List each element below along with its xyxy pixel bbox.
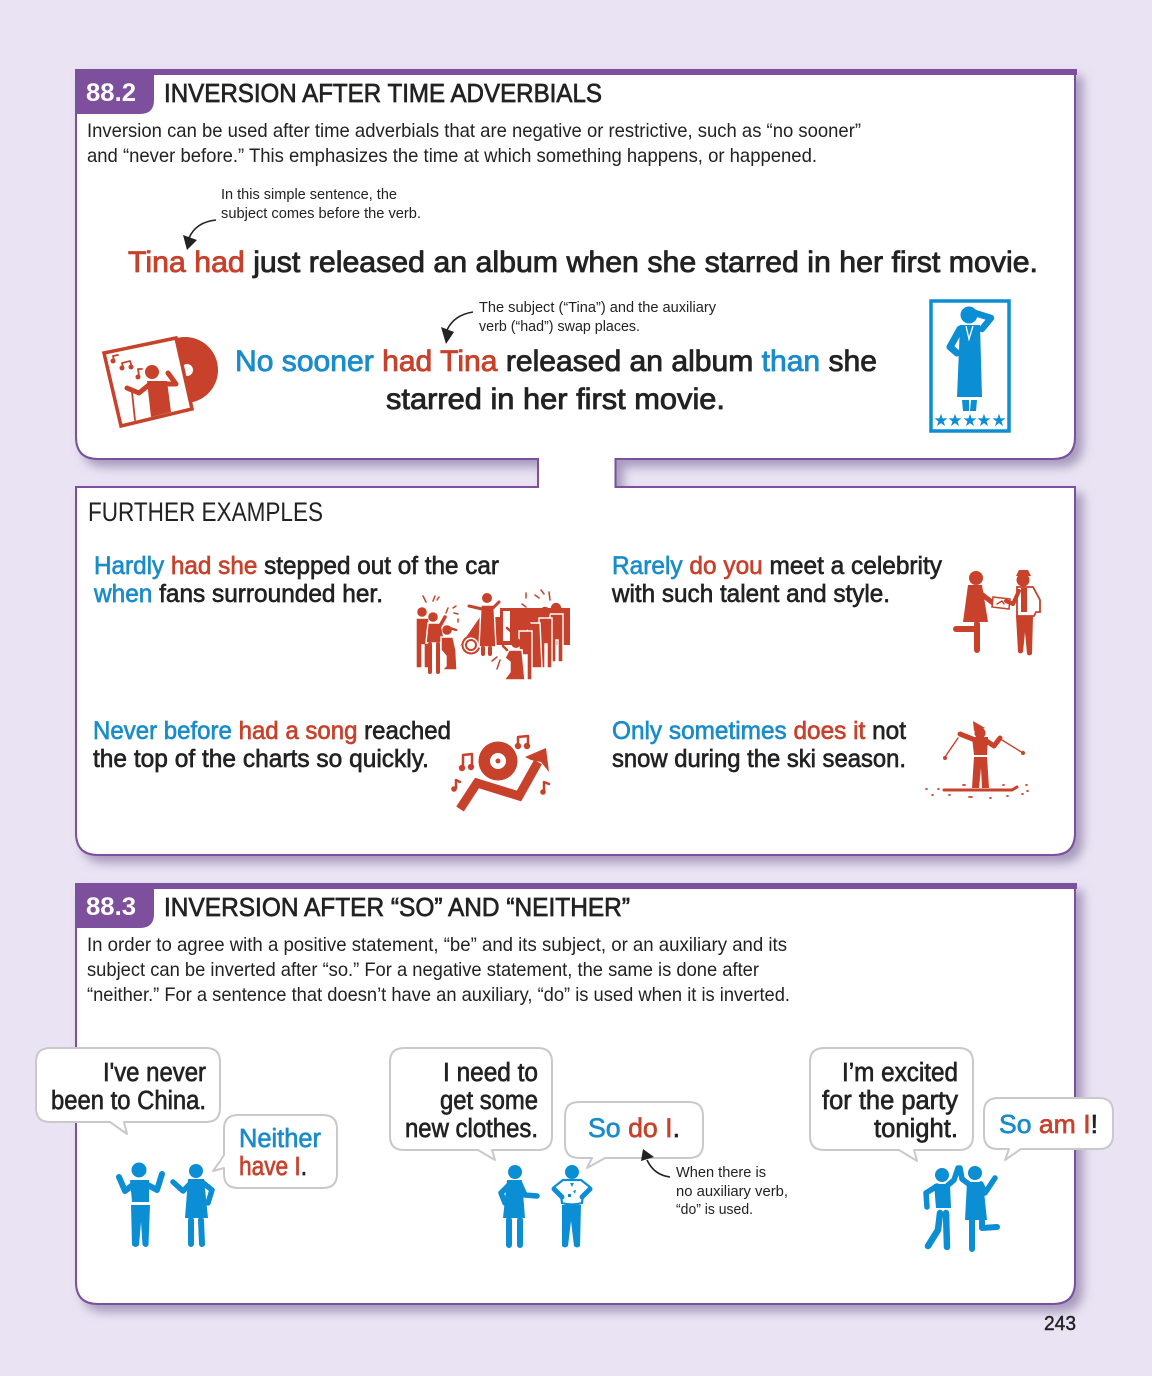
intro text: subject can be inverted after “so.” For a negative statement, the same is done after bbox=[87, 959, 759, 981]
speech bubble: I'm excited for the party tonight: for the party bbox=[822, 1087, 958, 1115]
annotation: simple sentence: subject comes before the verb. bbox=[221, 205, 421, 222]
section number tab 88.3 bbox=[75, 884, 154, 928]
speech bubble: I'm excited for the party tonight: tonight. bbox=[874, 1115, 958, 1143]
speech bubble: So do I: So do I. bbox=[588, 1113, 680, 1143]
annotation: no auxiliary verb bbox=[676, 1164, 788, 1218]
icon: movie poster with actress: ★ bbox=[991, 411, 1007, 430]
speech bubble: I need to get some new clothes: new clothes. bbox=[405, 1115, 538, 1143]
section number tab 88.3: 88.3 bbox=[86, 893, 136, 921]
panel: 88.3 inversion after so and neither bbox=[36, 883, 1113, 1305]
annotation: swap places: verb (“had”) swap places. bbox=[479, 318, 640, 335]
example: Hardly had she: Hardly had she stepped out of the car bbox=[94, 552, 499, 580]
intro text bbox=[87, 934, 790, 1006]
icon: movie poster with actress bbox=[931, 301, 1009, 431]
arrow to So do I bbox=[641, 1149, 670, 1177]
speech bubble: So do I bbox=[565, 1102, 703, 1168]
example: Rarely do you bbox=[611, 552, 942, 608]
heading: inversion after time adverbials: INVERSION AFTER TIME ADVERBIALS bbox=[164, 78, 602, 108]
example sentence: No sooner had Tina bbox=[235, 345, 877, 416]
example: Only sometimes does it bbox=[612, 717, 906, 773]
speech bubble: I'm excited for the party tonight: I’m excited bbox=[842, 1059, 958, 1087]
figure: man talking bbox=[119, 1162, 162, 1247]
intro text: In order to agree with a positive statement, “be” and its subject, or an auxiliary and its bbox=[87, 934, 787, 956]
speech bubble: I need to get some new clothes bbox=[390, 1048, 552, 1160]
speech bubble: never been to China bbox=[36, 1048, 220, 1134]
figure: man in shirt, hands on hips bbox=[554, 1165, 590, 1248]
speech bubble: I need to get some new clothes: I need to bbox=[443, 1059, 538, 1087]
speech bubble: I need to get some new clothes: get some bbox=[440, 1087, 538, 1115]
intro text: Inversion can be used after time adverbials that are negative or restrictive, such as “no sooner” bbox=[87, 120, 861, 142]
example: Never before had a song: the top of the charts so quickly. bbox=[93, 745, 429, 773]
figure: woman talking bbox=[501, 1165, 537, 1245]
speech bubble: So am I: So am I! bbox=[999, 1109, 1098, 1139]
example sentence: Tina had: Tina had just released an album when she starred in her first movie. bbox=[128, 246, 1038, 279]
intro text: “neither.” For a sentence that doesn’t have an auxiliary, “do” is used when it is inverted. bbox=[87, 984, 790, 1006]
figure: woman high-fiving bbox=[960, 1166, 997, 1249]
icon: fans surrounding celebrity by car bbox=[416, 590, 570, 680]
example: Hardly had she bbox=[93, 552, 499, 608]
icon: movie poster with actress: ★ bbox=[947, 411, 963, 430]
figure: woman replying bbox=[173, 1164, 212, 1244]
icon: movie poster with actress: ★ bbox=[976, 411, 992, 430]
example sentence: No sooner had Tina: starred in her first movie. bbox=[386, 383, 725, 416]
heading: inversion after so and neither: INVERSION AFTER “SO” AND “NEITHER” bbox=[164, 892, 630, 922]
icon: movie poster with actress: ★ bbox=[933, 411, 949, 430]
icon: album with singer bbox=[104, 337, 218, 426]
speech bubble: never been to China: I've never bbox=[103, 1059, 206, 1087]
example sentence: No sooner had Tina: No sooner had Tina released an album than she bbox=[235, 345, 877, 378]
speech bubble: Neither have I bbox=[213, 1115, 337, 1188]
panel: further examples bbox=[76, 487, 1076, 856]
icon: movie poster with actress: ★ bbox=[962, 411, 978, 430]
intro text: and “never before.” This emphasizes the time at which something happens, or happened. bbox=[87, 145, 817, 167]
annotation: no auxiliary verb: When there is bbox=[676, 1164, 766, 1181]
panel: 88.2 inversion after time adverbials bbox=[75, 69, 1077, 460]
page number: 243 bbox=[1044, 1313, 1076, 1335]
example: Only sometimes does it: Only sometimes does it not bbox=[612, 717, 906, 745]
annotation: no auxiliary verb: no auxiliary verb, bbox=[676, 1183, 788, 1200]
example: Only sometimes does it: snow during the ski season. bbox=[612, 745, 906, 773]
annotation: swap places bbox=[479, 299, 716, 335]
example: Never before had a song: Never before had a song reached bbox=[93, 717, 451, 745]
intro text bbox=[87, 120, 861, 167]
arrow to inverted sentence bbox=[441, 312, 473, 344]
example: Never before had a song bbox=[93, 717, 451, 773]
annotation: simple sentence bbox=[221, 186, 421, 222]
annotation: swap places: The subject (“Tina”) and the auxiliary bbox=[479, 299, 716, 316]
section number tab 88.2: 88.2 bbox=[86, 79, 136, 107]
icon: fan asks celebrity for autograph bbox=[956, 570, 1040, 656]
figure: man high-fiving bbox=[926, 1168, 958, 1247]
heading: further examples: FURTHER EXAMPLES bbox=[88, 497, 323, 527]
icon: record and rising arrow with notes bbox=[451, 736, 549, 809]
example: Hardly had she: when fans surrounded her. bbox=[93, 580, 383, 608]
annotation: simple sentence: In this simple sentence, the bbox=[221, 186, 397, 203]
speech bubble: Neither have I: have I. bbox=[239, 1153, 307, 1181]
icon: skier bbox=[926, 721, 1028, 798]
example: Rarely do you: Rarely do you meet a celebrity bbox=[612, 552, 942, 580]
speech bubble: So am I bbox=[984, 1098, 1113, 1160]
annotation: no auxiliary verb: “do” is used. bbox=[676, 1201, 753, 1218]
speech bubble: I'm excited for the party tonight bbox=[810, 1048, 973, 1161]
arrow to Tina had bbox=[183, 220, 216, 250]
speech bubble: Neither have I: Neither bbox=[239, 1125, 322, 1153]
example: Rarely do you: with such talent and style. bbox=[611, 580, 890, 608]
section number tab 88.2 bbox=[75, 70, 154, 114]
speech bubble: never been to China: been to China. bbox=[51, 1087, 206, 1115]
